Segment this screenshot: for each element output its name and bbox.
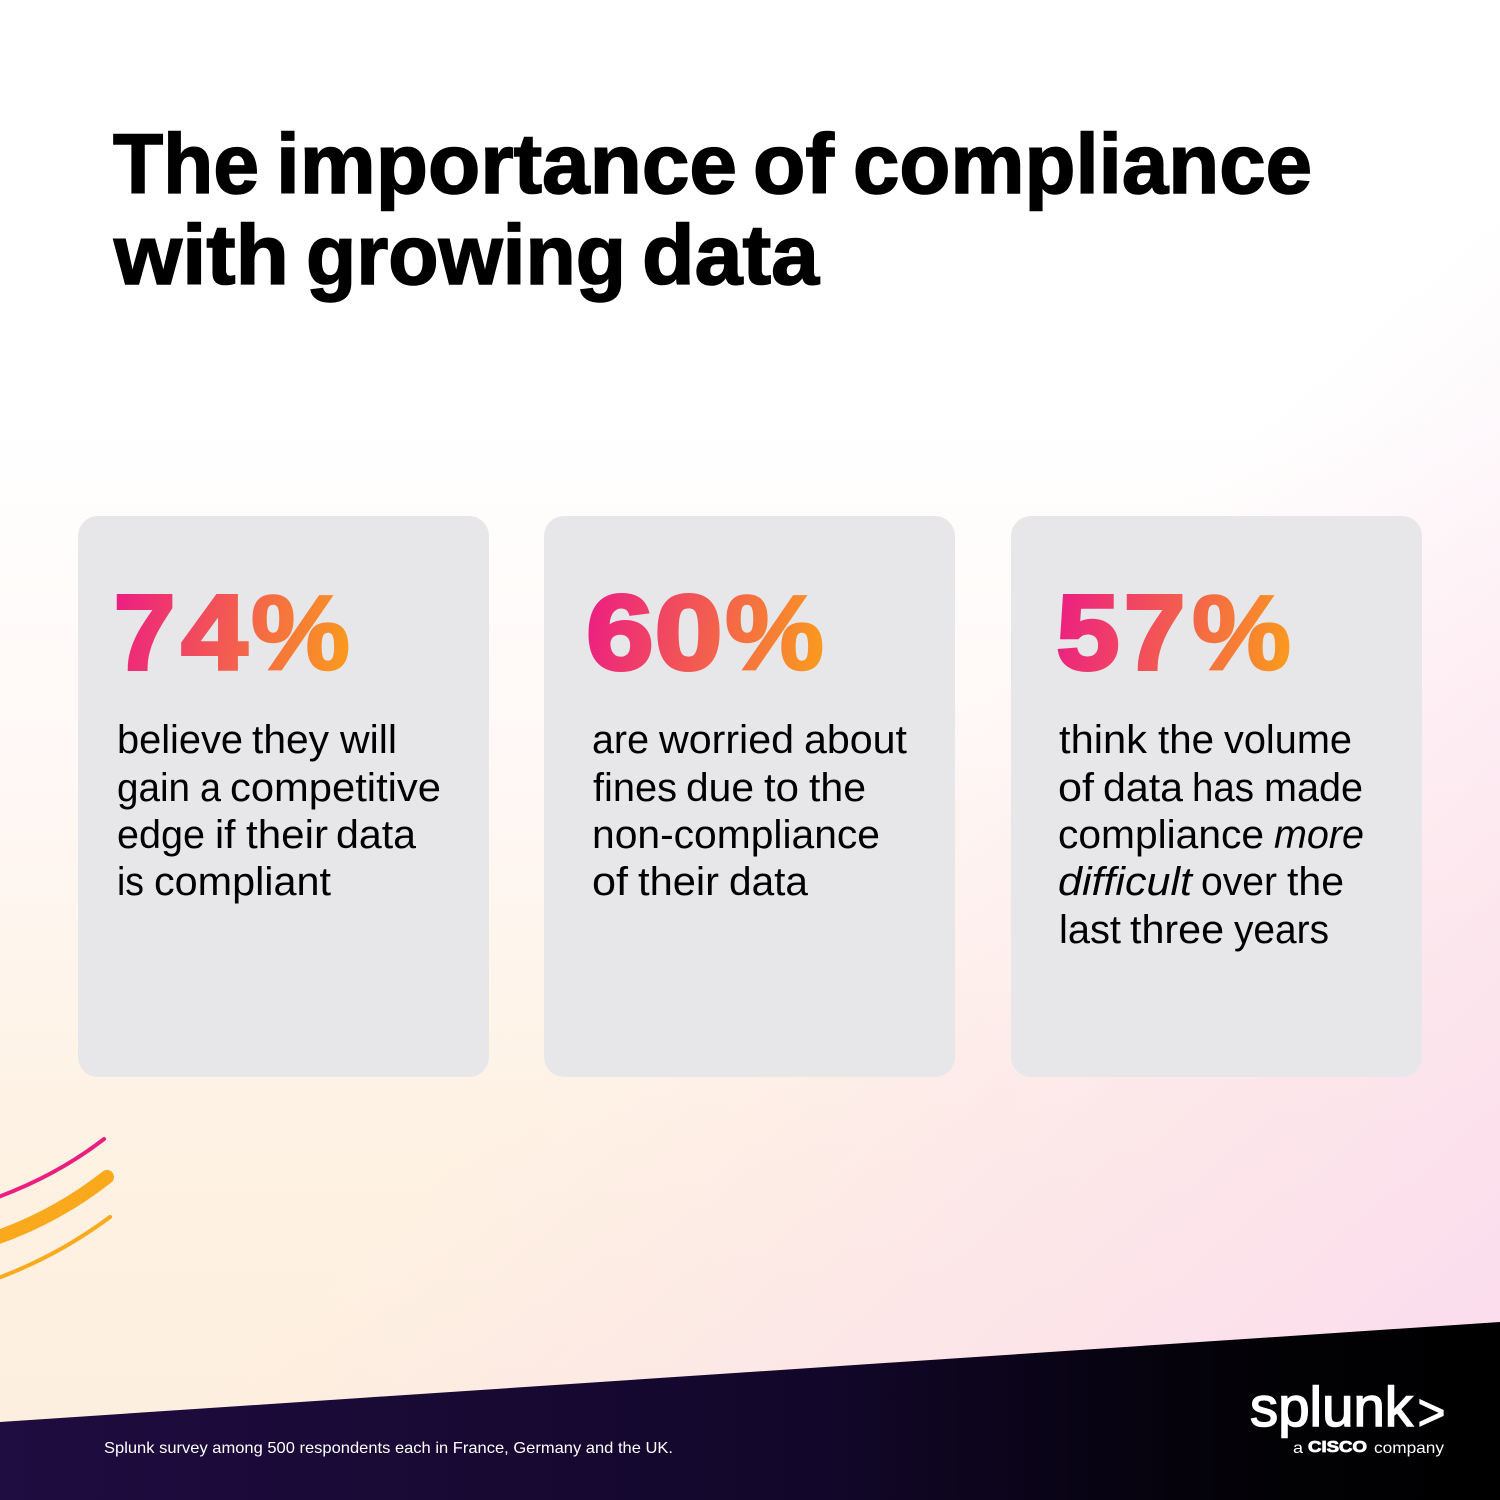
description: 57%: the: [1158, 718, 1214, 762]
description: 74%: edge: [117, 813, 205, 857]
title: data: [642, 208, 820, 302]
description: 60%: worried: [658, 718, 794, 762]
description: 74%: gain: [117, 766, 190, 810]
description: 57%: last: [1059, 908, 1121, 952]
title: importance: [276, 117, 737, 211]
title: of: [753, 117, 835, 211]
stat: 57%: [1057, 574, 1291, 692]
logo: splunk a cisco company: [1250, 1375, 1446, 1457]
description: 74%: if: [215, 813, 236, 857]
description: 60%: their: [638, 860, 719, 904]
description: 57%: [1058, 718, 1364, 952]
description: 74%: believe: [117, 718, 243, 762]
description: 57%: compliance: [1058, 813, 1264, 857]
logo: splunk a cisco company: CISCO: [1308, 1439, 1367, 1456]
logo: splunk a cisco company: >: [1418, 1384, 1446, 1442]
stat: 74%: 4: [182, 574, 247, 692]
description: 60%: [592, 718, 907, 904]
stat: 60%: 0: [655, 574, 722, 692]
stat: 60%: %: [725, 574, 824, 692]
logo: splunk a cisco company: company: [1374, 1440, 1444, 1457]
panel: 74%: [78, 516, 489, 1077]
panel: 60%: [544, 516, 955, 1077]
description: 57%: years: [1234, 908, 1329, 952]
description: 74%: is: [117, 860, 144, 904]
description: 57%: of: [1058, 766, 1095, 810]
logo: splunk a cisco company: splunk: [1250, 1375, 1414, 1438]
description: 60%: due: [686, 766, 754, 810]
description: 74%: competitive: [230, 766, 441, 810]
description: 74%: a: [200, 766, 222, 810]
description: 57%: over: [1201, 860, 1277, 904]
description: 57%: the: [1287, 860, 1344, 904]
description: 57%: made: [1264, 766, 1363, 810]
stat: 74%: %: [251, 574, 350, 692]
description: 60%: to: [764, 766, 799, 810]
footnote: Splunk survey among 500 respondents each in France, Germany and the UK.: [104, 1440, 673, 1457]
title: growing: [306, 208, 626, 302]
title: with: [113, 208, 289, 302]
stat: 60%: 6: [586, 574, 653, 692]
description: 60%: of: [592, 860, 629, 904]
logo: splunk a cisco company: a: [1293, 1440, 1303, 1457]
description: 74%: will: [339, 718, 397, 762]
description: 60%: the: [809, 766, 866, 810]
description: 60%: non-compliance: [592, 813, 880, 857]
stat: 60%: [586, 574, 824, 692]
description: 57%: difficult: [1058, 860, 1194, 904]
stat: 74%: 7: [114, 574, 175, 692]
description: 57%: three: [1130, 908, 1224, 952]
description: 60%: are: [592, 718, 649, 762]
description: 60%: data: [729, 860, 809, 904]
description: 60%: about: [804, 718, 907, 762]
panel: 57%: [1011, 516, 1422, 1077]
description: 74%: they: [252, 718, 329, 762]
title: compliance: [853, 117, 1312, 211]
stat: 57%: %: [1192, 574, 1291, 692]
stat: 74%: [114, 574, 350, 692]
stat: 57%: 5: [1057, 574, 1119, 692]
description: 60%: fines: [593, 766, 677, 810]
description: 57%: data: [1103, 766, 1184, 810]
title: [113, 117, 1312, 302]
stat: 57%: 7: [1124, 574, 1185, 692]
decorative swooshes: [0, 1139, 110, 1281]
description: 57%: volume: [1224, 718, 1352, 762]
description: 74%: data: [336, 813, 417, 857]
description: 57%: more: [1274, 813, 1364, 857]
footer band: [0, 1322, 1500, 1500]
description: 74%: their: [246, 813, 328, 857]
description: 57%: has: [1192, 766, 1254, 810]
description: 74%: [117, 718, 441, 904]
description: 74%: compliant: [154, 860, 331, 904]
description: 57%: think: [1059, 718, 1148, 762]
title: The: [113, 117, 259, 211]
